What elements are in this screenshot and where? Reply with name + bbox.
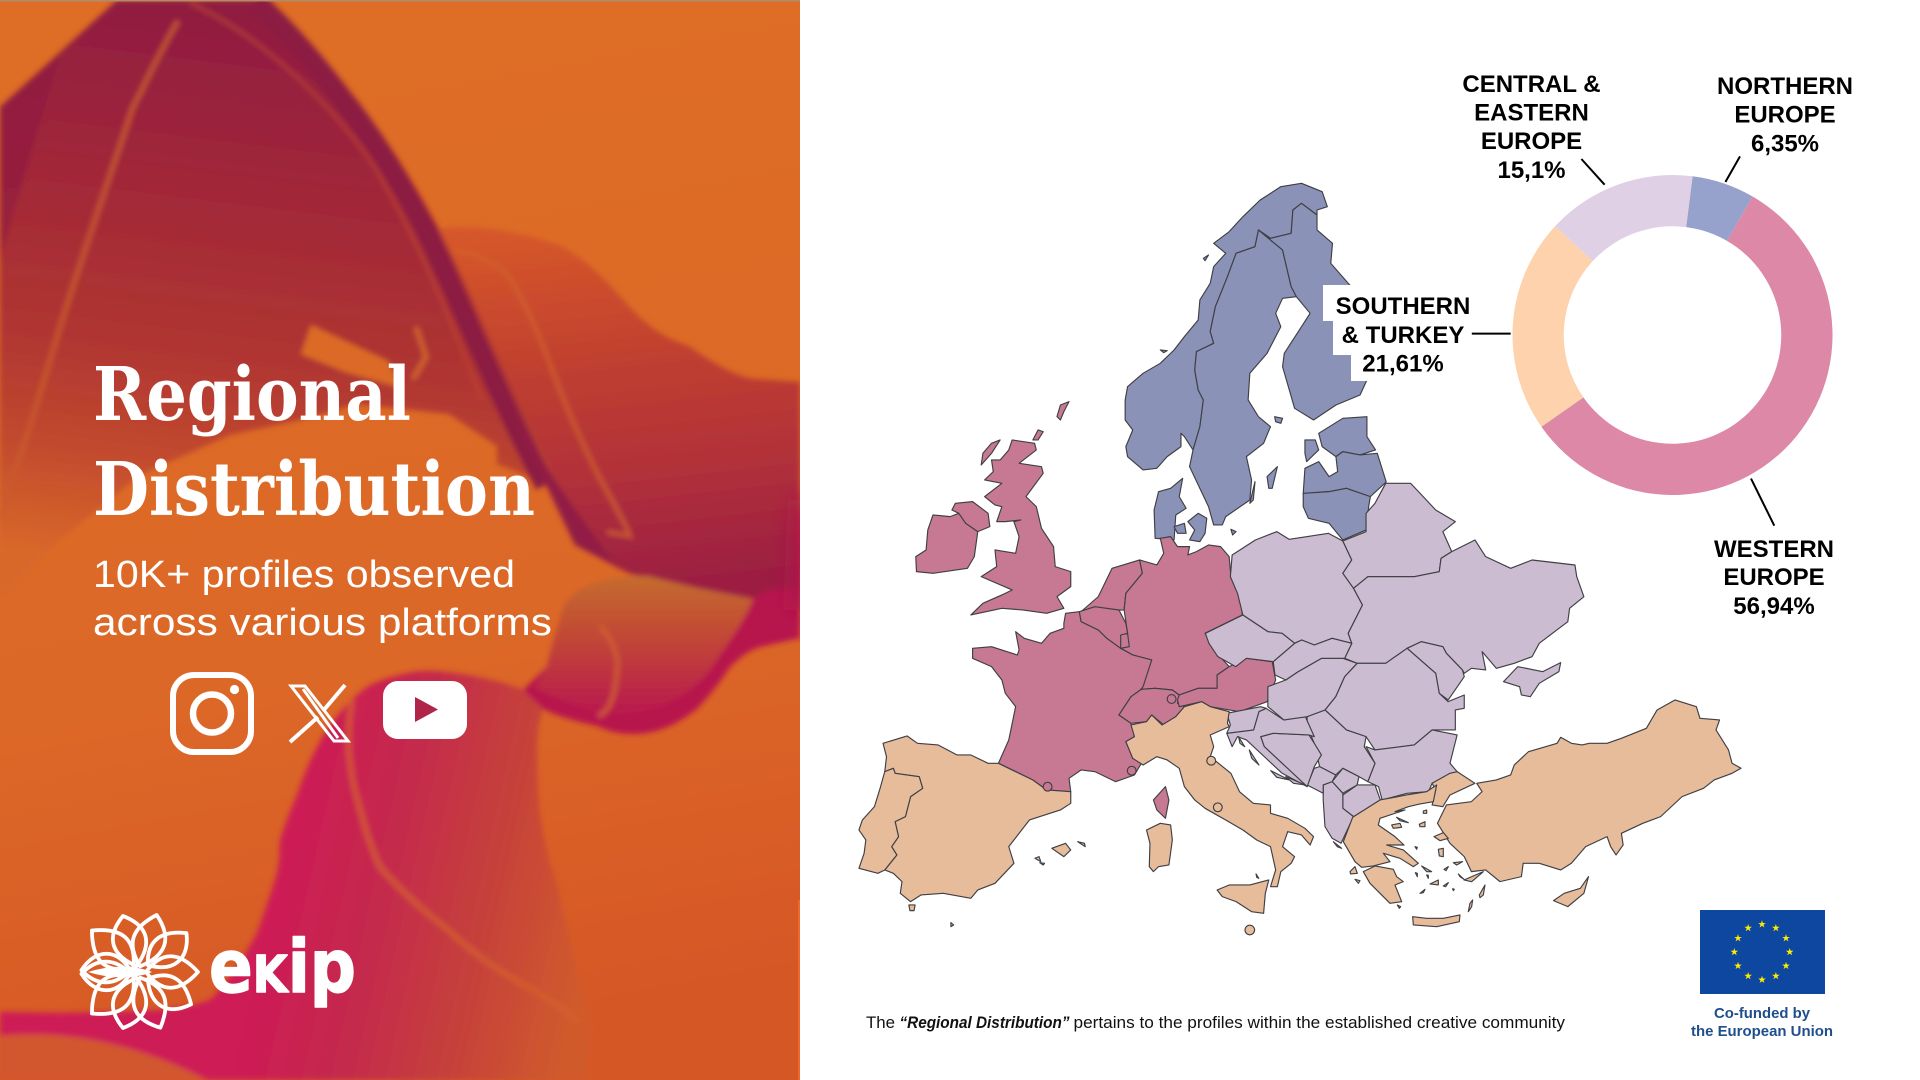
footnote: pertains to the profiles within the established creative community (1074, 1013, 1566, 1032)
segment: western Europe (1541, 197, 1833, 495)
EU co-funding caption (1691, 1005, 1833, 1040)
label: southern Europe and Turkey: SOUTHERN (1336, 293, 1470, 320)
white backing behind southern label (1323, 285, 1472, 381)
EU flag (1700, 910, 1825, 994)
subtitle (93, 554, 552, 644)
logo: ekip wordmark: ekip (209, 925, 356, 1010)
segment: southern Europe and Turkey (1513, 226, 1593, 427)
Turkey and Cyprus (1432, 700, 1741, 907)
France, Belgium, Switzerland, Austria, Corsica (973, 607, 1276, 818)
label: northern Europe: NORTHERN (1717, 73, 1853, 100)
label: central and eastern Europe: EUROPE (1481, 128, 1582, 155)
label: southern Europe and Turkey (1336, 293, 1511, 378)
panel: left gradient artwork (0, 0, 825, 1080)
region: southern Europe and Turkey (859, 700, 1741, 927)
Iberia, Italy and western islands (859, 702, 1314, 927)
small circled territories (1043, 695, 1255, 935)
label: western Europe: 56,94% (1733, 593, 1815, 620)
segment: northern Europe (1686, 176, 1753, 241)
label: southern Europe and Turkey: 21,61% (1362, 350, 1444, 378)
EU co-funding caption: Co-funded by (1714, 1005, 1811, 1022)
donut chart (1513, 175, 1833, 495)
Scandinavia and Baltic countries (1125, 183, 1386, 542)
label: central and eastern Europe: 15,1% (1497, 157, 1566, 184)
label: central and eastern Europe: EASTERN (1474, 100, 1589, 126)
label: western Europe (1714, 479, 1834, 620)
icon: instagram (173, 675, 251, 752)
label: northern Europe: EUROPE (1734, 102, 1836, 129)
label: western Europe: WESTERN (1714, 536, 1834, 563)
subtitle: 10K+ profiles observed (93, 554, 515, 596)
footnote: “Regional Distribution” (900, 1013, 1070, 1032)
Greece and Aegean islands (1333, 785, 1485, 927)
title (93, 352, 535, 533)
footnote (866, 1013, 1566, 1032)
British Isles, Benelux and Germany (916, 402, 1242, 695)
title: Regional (93, 352, 411, 438)
footnote: The (866, 1013, 895, 1032)
label: central and eastern Europe (1462, 71, 1605, 185)
label: central and eastern Europe: CENTRAL & (1462, 71, 1601, 98)
map of Europe (859, 183, 1741, 927)
region: western Europe (916, 402, 1276, 818)
segment: central and eastern Europe (1555, 175, 1693, 261)
logo: ekip flower (80, 910, 198, 1034)
subtitle: across various platforms (93, 602, 552, 644)
title: Distribution (93, 447, 535, 533)
EU co-funding caption: the European Union (1691, 1023, 1833, 1040)
region: northern Europe (1125, 183, 1386, 542)
icon: youtube (383, 681, 467, 739)
label: southern Europe and Turkey: & TURKEY (1342, 322, 1464, 349)
region: central and eastern Europe (1205, 483, 1584, 843)
label: northern Europe: 6,35% (1751, 130, 1819, 157)
label: western Europe: EUROPE (1723, 564, 1825, 591)
label: northern Europe (1717, 73, 1853, 182)
icon: X (290, 685, 348, 742)
